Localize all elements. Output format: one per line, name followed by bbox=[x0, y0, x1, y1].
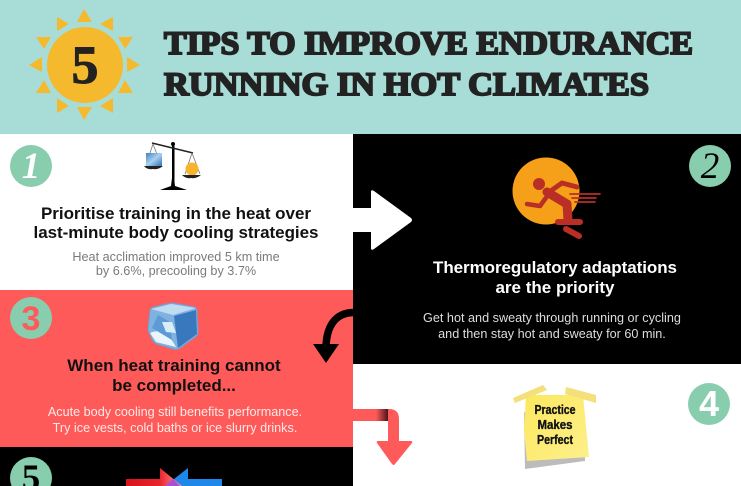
heading: tip 2 bbox=[433, 258, 677, 297]
icon: balance scale with ice and sun bbox=[144, 142, 201, 190]
badge: number 2: 2 bbox=[701, 146, 719, 187]
text: tip 2 body bbox=[423, 311, 681, 341]
icon: sticky note: Practice bbox=[534, 402, 576, 417]
text: tip 1 body bbox=[72, 250, 280, 278]
icon: sun with number 5: 5 bbox=[72, 35, 98, 95]
panel: header bbox=[0, 0, 741, 134]
badge: number 1: 1 bbox=[22, 146, 40, 187]
text: tip 2 body: Get hot and sweaty through running or cycling bbox=[423, 311, 681, 325]
icon: ice cube bbox=[148, 303, 198, 349]
arrow: red bent down bbox=[353, 409, 412, 465]
text: tip 2 body: and then stay hot and sweaty for 60 min. bbox=[438, 327, 666, 341]
heading: tip 3: When heat training cannot bbox=[67, 356, 281, 375]
icon: runner in sun bbox=[512, 158, 600, 236]
heading: tip 1 second line: last-minute body cooling strategies bbox=[34, 223, 318, 242]
text: tip 3 body bbox=[48, 405, 302, 435]
heading: tip 1: Prioritise training in the heat over bbox=[41, 204, 311, 223]
arrow: white right bbox=[353, 190, 412, 250]
heading: tip 3 bbox=[67, 356, 281, 395]
badge: number 3: 3 bbox=[22, 300, 40, 338]
title: TIPS TO IMPROVE ENDURANCE bbox=[164, 26, 693, 62]
panel: tip 2 bbox=[353, 134, 741, 364]
icon: sun with number 5 bbox=[29, 9, 140, 120]
badge: number 5 bbox=[10, 457, 52, 486]
title: RUNNING IN HOT CLIMATES bbox=[164, 67, 649, 103]
arrow: black curved down bbox=[313, 312, 353, 363]
text: tip 1 body: by 6.6%, precooling by 3.7% bbox=[96, 264, 256, 278]
icon: crossing red and blue arrows bbox=[126, 468, 222, 486]
heading: tip 2: are the priority bbox=[495, 278, 615, 297]
text: tip 1 body: Heat acclimation improved 5 km time bbox=[72, 250, 280, 264]
badge: number 4: 4 bbox=[699, 383, 719, 424]
text: tip 3 body: Acute body cooling still benefits performance. bbox=[48, 405, 302, 419]
heading: tip 2: Thermoregulatory adaptations bbox=[433, 258, 677, 277]
icon: sticky note: Makes bbox=[538, 417, 572, 432]
text: tip 3 body: Try ice vests, cold baths or ice slurry drinks. bbox=[53, 421, 297, 435]
badge: number 3 bbox=[10, 297, 52, 339]
badge: number 2 bbox=[689, 145, 731, 187]
title bbox=[164, 26, 693, 103]
heading: tip 3: be completed... bbox=[112, 376, 236, 395]
panel: tip 5 bbox=[0, 447, 353, 486]
panel: tip 4 bbox=[353, 364, 741, 486]
panel: tip 3 bbox=[0, 290, 353, 447]
panel: tip 1 bbox=[0, 134, 353, 290]
badge: number 1 bbox=[10, 145, 52, 187]
badge: number 4 bbox=[688, 383, 730, 425]
icon: sticky note: Perfect bbox=[537, 432, 574, 447]
icon: sticky note bbox=[513, 385, 596, 469]
